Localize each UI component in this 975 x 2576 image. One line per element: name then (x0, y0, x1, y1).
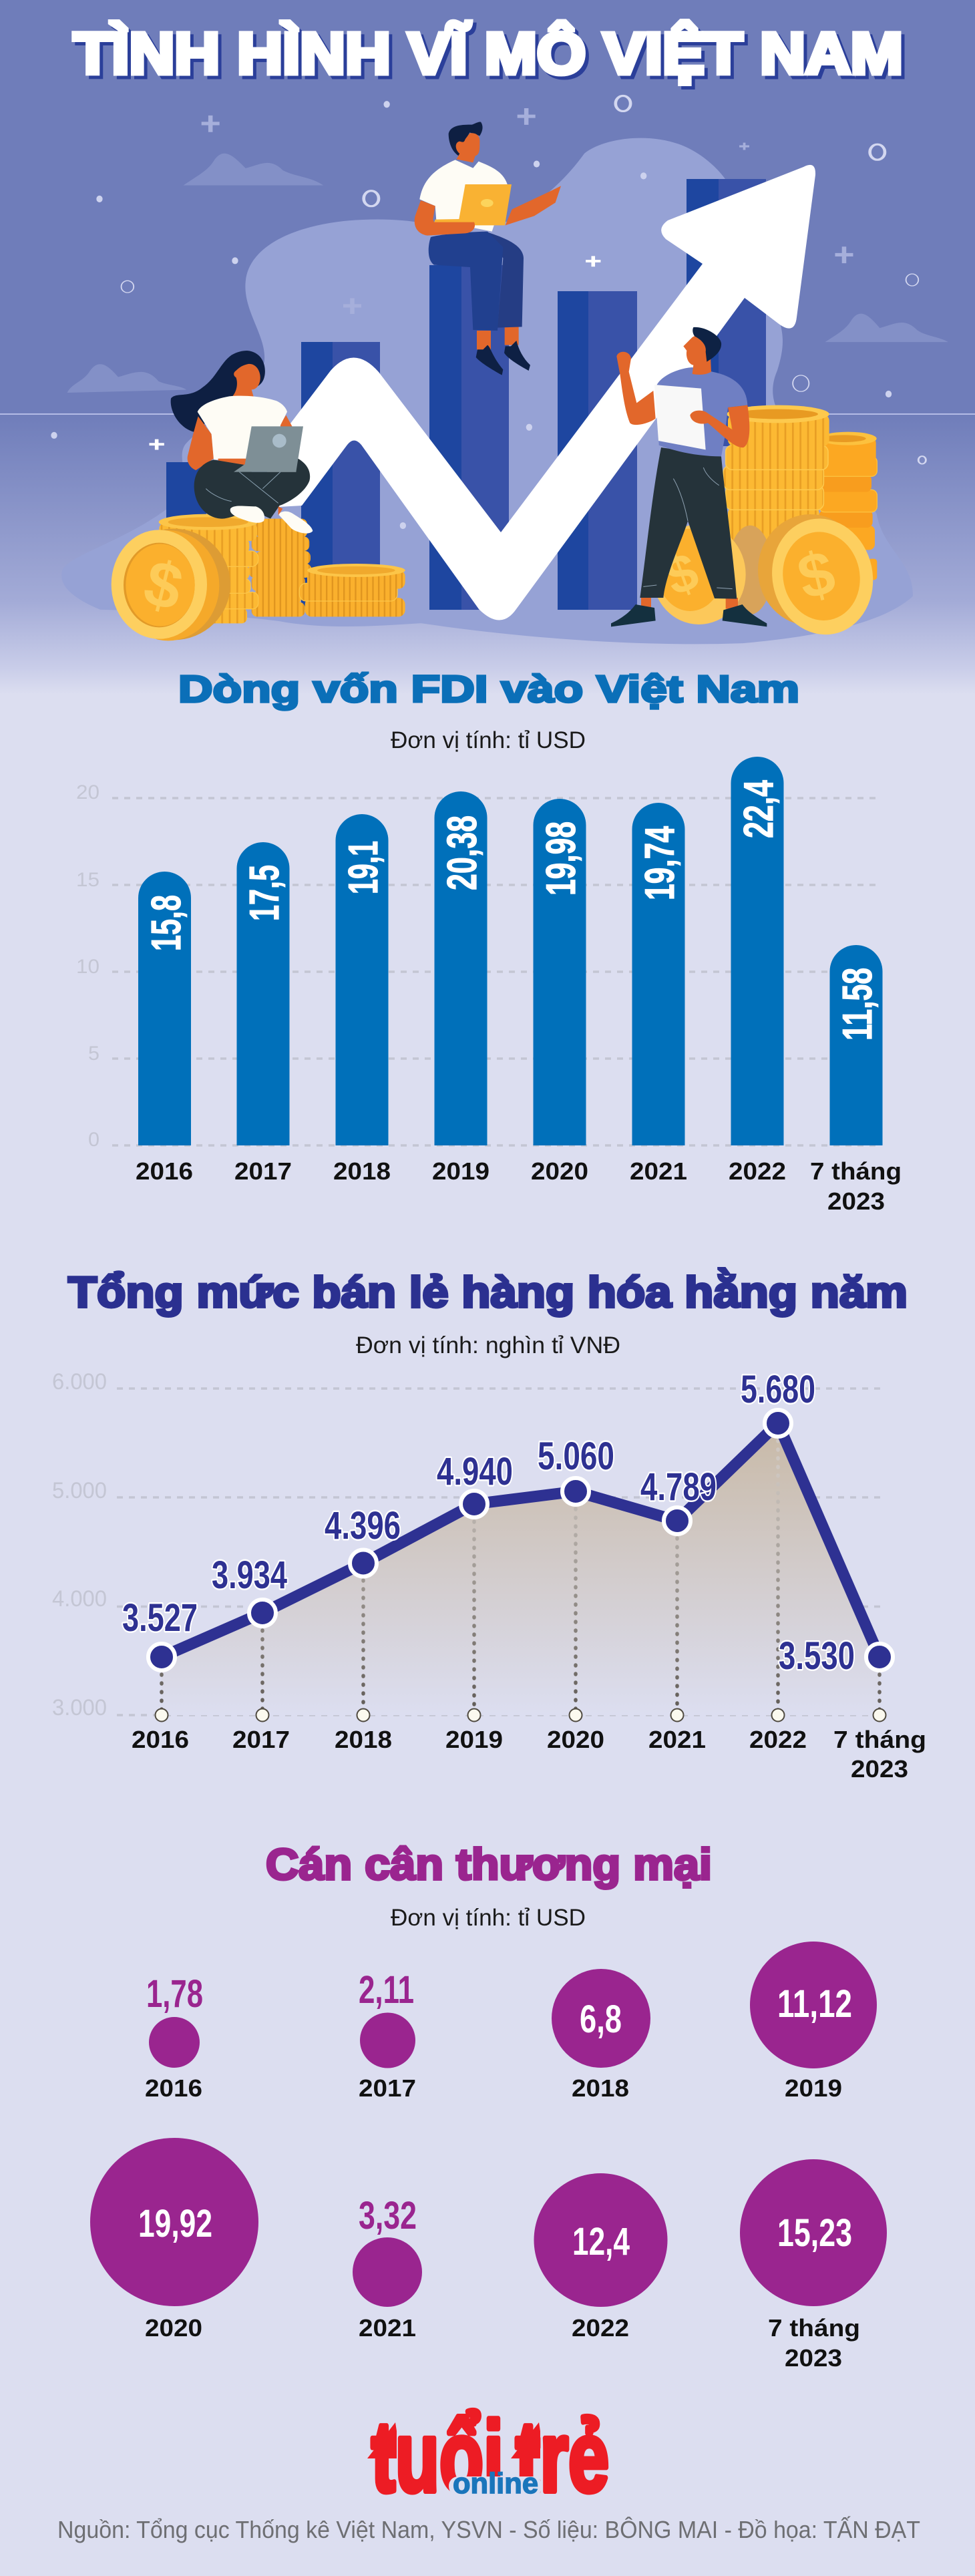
FDI values: 11,58 (835, 968, 881, 1041)
front dollar coin: $ (791, 537, 841, 612)
FDI values: 19,98 (538, 821, 584, 896)
bubble values (138, 1968, 852, 2263)
grid and axis labels: 5 (88, 1043, 100, 1065)
bubble year labels: 2019 (785, 2074, 842, 2102)
FDI values: 17,5 (242, 865, 288, 921)
FDI bars (138, 757, 883, 1145)
retail values: 5.680 (741, 1368, 815, 1411)
heading: trade balance: Cán cân thương mại (266, 1839, 712, 1889)
bubble year labels: 2017 (359, 2074, 416, 2102)
FDI year labels: 2019 (432, 1157, 490, 1185)
FDI year labels: 2018 (333, 1157, 391, 1185)
FDI values: 15,8 (144, 895, 190, 951)
FDI values: 20,38 (439, 815, 485, 890)
retail line (162, 1423, 880, 1657)
bottom axis markers (155, 1708, 886, 1722)
bubbles (90, 1942, 887, 2307)
bubble values: 11,12 (777, 1982, 852, 2026)
retail values: 3.530 (779, 1634, 855, 1678)
illustration: man sitting on bar with yellow laptop (415, 122, 561, 375)
rear dollar coin: $ (657, 541, 706, 607)
FDI year labels: 2017 (234, 1157, 292, 1185)
grid and axis labels: 20 (76, 781, 100, 803)
FDI year labels: 2023 (827, 1187, 885, 1215)
grid and axis labels (52, 1369, 883, 1720)
bubble year labels: 2018 (572, 2074, 629, 2102)
bubble values: 6,8 (580, 1998, 622, 2041)
retail year labels: 2018 (335, 1726, 392, 1753)
grid and axis labels: 6.000 (52, 1369, 107, 1395)
panel: FDI bar chart (76, 668, 902, 1215)
front dollar coin (758, 509, 884, 644)
bubble year labels: 2020 (145, 2314, 202, 2342)
bubble year labels: 2022 (572, 2314, 629, 2342)
background blob and decorations (51, 96, 948, 644)
retail year labels: 2017 (232, 1726, 290, 1753)
woman figure (171, 351, 313, 534)
FDI values: 22,4 (736, 780, 782, 838)
panel: retail line chart (52, 1268, 926, 1783)
panel: trade balance bubbles (90, 1839, 887, 2372)
grid and axis labels (76, 781, 877, 1151)
retail data points (148, 1410, 893, 1670)
grid and axis labels: 5.000 (52, 1478, 107, 1503)
logo: Tuổi Trẻ Online: trẻ (516, 2400, 609, 2513)
FDI year labels: 2020 (531, 1157, 588, 1185)
bubble values: 2,11 (359, 1968, 414, 2012)
retail values: 4.396 (325, 1504, 401, 1547)
shaded area under line (162, 1423, 880, 1715)
retail year labels: 2023 (851, 1755, 908, 1783)
unit label: retail: Đơn vị tính: nghìn tỉ VNĐ (356, 1332, 620, 1358)
bubble year labels: 2023 (785, 2344, 842, 2372)
small coin stack (299, 564, 405, 616)
illustration: white zigzag arrow (267, 165, 815, 620)
unit label: trade: Đơn vị tính: tỉ USD (391, 1905, 586, 1931)
big dollar coin (112, 529, 230, 640)
retail values (122, 1368, 855, 1678)
FDI values: 19,1 (341, 841, 387, 894)
FDI year labels: 2021 (630, 1157, 687, 1185)
title: TÌNH HÌNH VĨ MÔ VIỆT NAM (73, 21, 903, 86)
FDI year labels: 7 tháng (810, 1157, 902, 1185)
illustration: left coin stacks and woman (112, 351, 405, 640)
FDI values: 19,74 (637, 826, 683, 900)
bubble values: 15,23 (777, 2211, 852, 2255)
grid and axis labels: 3.000 (52, 1695, 107, 1720)
retail year labels: 2016 (132, 1726, 189, 1753)
retail year labels: 2019 (445, 1726, 503, 1753)
grid and axis labels: 0 (88, 1129, 100, 1151)
bubble values: 1,78 (146, 1972, 203, 2016)
rear dollar coin (652, 524, 773, 624)
bubble year labels: 2021 (359, 2314, 416, 2342)
retail values: 4.789 (640, 1465, 717, 1509)
bubble values: 19,92 (138, 2202, 212, 2245)
retail year labels (132, 1726, 926, 1783)
bubble values: 12,4 (572, 2220, 630, 2263)
grid and axis labels: 4.000 (52, 1586, 107, 1612)
retail year labels: 2022 (749, 1726, 807, 1753)
retail values: 5.060 (538, 1435, 614, 1478)
unit label: FDI: Đơn vị tính: tỉ USD (391, 727, 586, 753)
retail values: 3.934 (212, 1553, 287, 1597)
source credit: Nguồn: Tổng cục Thống kê Việt Nam, YSVN - Số liệu: BÔNG MAI - Đồ họa: TẤN ĐẠT (57, 2516, 920, 2543)
logo: Tuổi Trẻ Online: tuổi (371, 2400, 504, 2513)
retail values: 4.940 (437, 1450, 513, 1493)
illustration: rising bars (166, 179, 766, 610)
FDI values (144, 780, 881, 1041)
retail year labels: 7 tháng (833, 1726, 926, 1753)
retail year labels: 2021 (648, 1726, 706, 1753)
dotted drop lines (162, 1423, 880, 1715)
big dollar coin: $ (138, 546, 190, 624)
bubble year labels: 2016 (145, 2074, 202, 2102)
retail values: 3.527 (122, 1596, 198, 1640)
retail year labels: 2020 (547, 1726, 604, 1753)
bubble values: 3,32 (359, 2194, 417, 2237)
bubble year labels: 7 tháng (768, 2314, 860, 2342)
horizon line (0, 413, 975, 415)
heading: FDI: Dòng vốn FDI vào Việt Nam (178, 668, 799, 711)
FDI year labels: 2022 (729, 1157, 786, 1185)
bubble year labels (145, 2074, 860, 2372)
grid and axis labels: 10 (76, 956, 100, 978)
FDI year labels: 2016 (136, 1157, 193, 1185)
heading: retail: Tổng mức bán lẻ hàng hóa hằng năm (68, 1268, 908, 1316)
grid and axis labels: 15 (76, 869, 100, 891)
FDI year labels (136, 1157, 902, 1215)
standing man figure (611, 327, 767, 626)
logo: Tuổi Trẻ Online: online (453, 2467, 538, 2500)
illustration: right coin stacks and standing man (611, 327, 884, 644)
